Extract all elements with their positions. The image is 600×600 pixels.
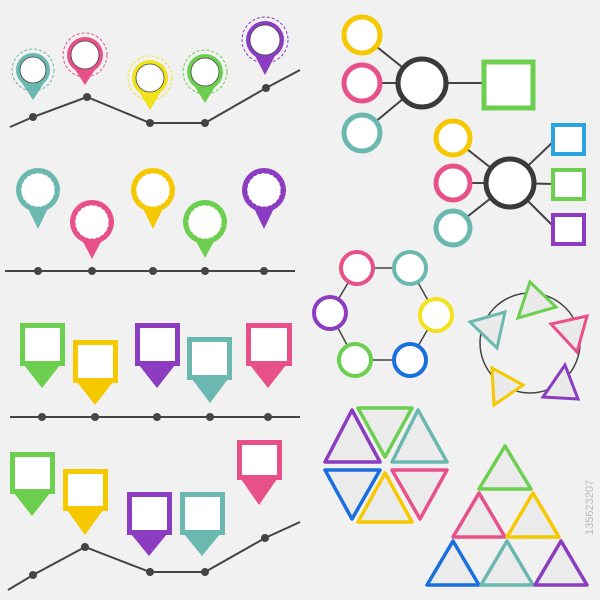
diagram: pyramid of triangles: [427, 446, 587, 585]
square pin: purple: [127, 492, 172, 556]
pin: purple: [242, 168, 286, 229]
square pin: teal: [187, 337, 232, 403]
panel: square pins straight line: [10, 323, 300, 421]
square pin: yellow: [73, 340, 118, 405]
panel: square pins curved line: [8, 440, 300, 590]
square pin: pink: [237, 440, 282, 505]
pin: green: [183, 50, 227, 103]
panel: pins on curved line: [10, 17, 300, 127]
square pin: green: [10, 452, 55, 516]
pin: purple: [242, 17, 288, 75]
diagram: three circles to one square: [344, 17, 533, 151]
square pin: pink: [246, 323, 292, 388]
pin: pink: [70, 200, 114, 259]
pin: yellow: [131, 168, 175, 229]
pin: teal: [12, 49, 54, 100]
pin: yellow: [128, 56, 172, 110]
diagram: three circles to three squares: [436, 121, 584, 245]
pin: teal: [16, 168, 60, 229]
watermark id: 135623207: [584, 480, 596, 535]
square pin: teal: [180, 492, 225, 556]
pin: green: [183, 200, 227, 258]
diagram: hexagon ring of circles: [314, 252, 452, 376]
diagram: hexagon of triangles: [325, 408, 447, 522]
square pin: purple: [135, 323, 180, 388]
square pin: yellow: [63, 469, 108, 535]
pin: pink: [63, 33, 107, 85]
diagram: triangle cycle: [470, 282, 587, 405]
panel: pins on straight line: [5, 168, 295, 275]
square pin: green: [20, 323, 65, 388]
